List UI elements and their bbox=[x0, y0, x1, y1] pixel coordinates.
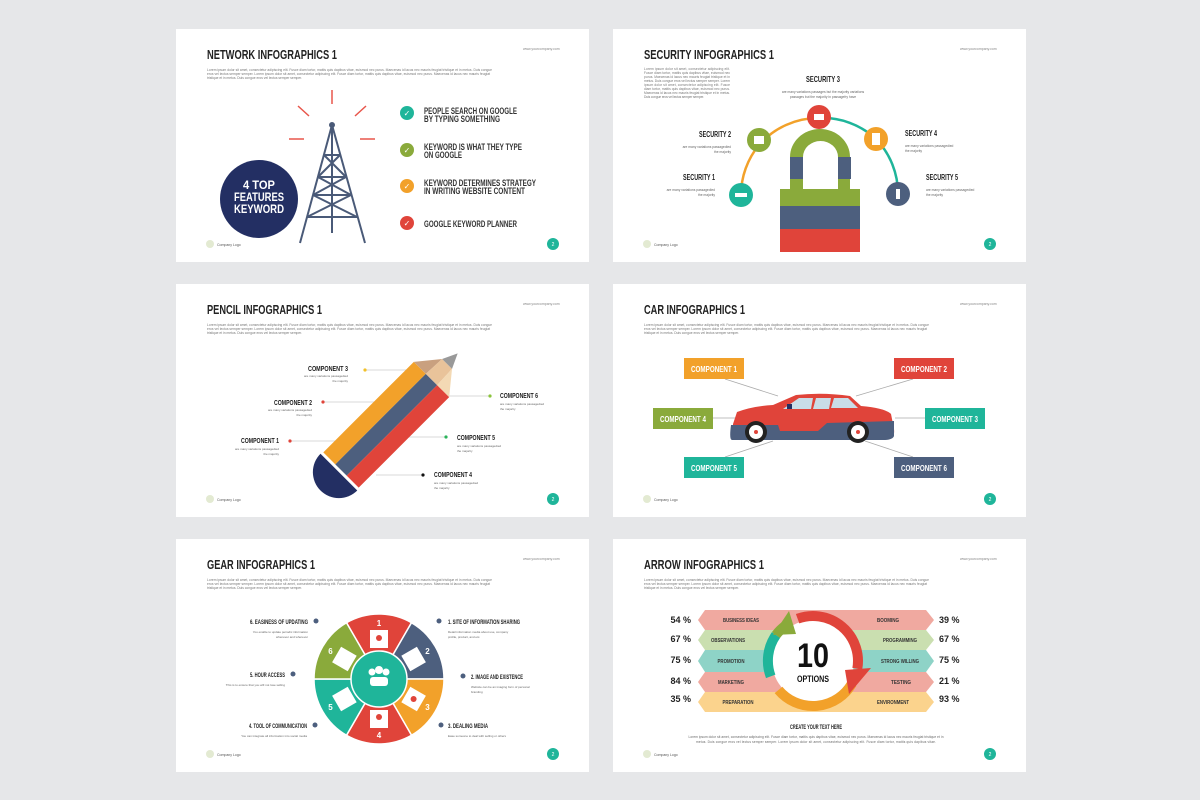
lorem text block: ipsum dolor sit amet, consectetur adipiscing elit. Fusce bbox=[644, 83, 730, 87]
gear labels: 4. TOOL OF COMMUNICATION bbox=[249, 723, 307, 730]
lorem text block: purus. Maecenas id lacus nec mauris feugiat tristique et in bbox=[644, 75, 730, 79]
lorem text block: Lorem ipsum dolor sit amet, consectetur adipiscing elit. bbox=[644, 67, 730, 71]
percentages bbox=[670, 615, 960, 704]
component labels: the majority bbox=[263, 452, 279, 456]
gear chart: 3 bbox=[425, 703, 430, 712]
footer: 2 bbox=[552, 752, 555, 758]
gear labels: You can integrate all information into social media bbox=[241, 734, 307, 738]
footer: 2 bbox=[989, 752, 992, 758]
footer bbox=[643, 238, 996, 250]
checklist: ✓ bbox=[404, 219, 410, 228]
footer: Company Logo bbox=[654, 498, 678, 502]
lorem text block: Maecenas id lacus nec mauris feugiat tristique et in metus. bbox=[644, 91, 730, 95]
component boxes: COMPONENT 4 bbox=[660, 414, 706, 424]
gear labels: 5. HOUR ACCESS bbox=[250, 672, 285, 679]
labels: SECURITY 3 bbox=[806, 74, 840, 84]
panel: car infographics bbox=[613, 284, 1026, 517]
footer bbox=[643, 748, 996, 760]
band labels: STRONG WILLING bbox=[881, 659, 919, 665]
band labels: PROMOTION bbox=[718, 659, 745, 665]
connector lines bbox=[713, 379, 925, 457]
heading: CAR INFOGRAPHICS 1 bbox=[644, 302, 745, 317]
labels bbox=[667, 74, 975, 197]
footer bbox=[206, 748, 559, 760]
labels: SECURITY 1 bbox=[683, 173, 715, 182]
lorem text block: eros vel lectus semper semper. Lorem ipsum dolor sit amet, consectetur adipiscing elit. Fusce diam tortor, mattis quis dapibus vitae, euismod nec purus. Maecenas id lacus nec mauris feugiat bbox=[207, 72, 490, 76]
band labels: MARKETING bbox=[718, 680, 744, 686]
labels: the majority bbox=[926, 193, 943, 197]
footer: 2 bbox=[552, 242, 555, 248]
checklist: BY TYPING SOMETHING bbox=[424, 114, 500, 124]
gear labels: 6. EASINESS OF UPDATING bbox=[250, 619, 308, 626]
component labels: COMPONENT 6 bbox=[500, 391, 538, 400]
band labels: TESTING bbox=[891, 680, 911, 686]
checklist bbox=[400, 106, 536, 230]
percentages: 35 % bbox=[670, 694, 691, 704]
percentages: 75 % bbox=[939, 655, 960, 665]
footer bbox=[643, 493, 996, 505]
component labels: the majority bbox=[434, 486, 450, 490]
gear chart: 2 bbox=[425, 647, 430, 656]
labels: are many variations passagedied bbox=[667, 188, 715, 192]
component labels: the majority bbox=[296, 413, 312, 417]
checklist: IN WRITING WEBSITE CONTENT bbox=[424, 186, 525, 196]
percentages: 54 % bbox=[670, 615, 691, 625]
gear labels: You enable to update periodic information bbox=[253, 630, 308, 634]
labels: are many variations passagedied bbox=[926, 188, 975, 192]
heading: NETWORK INFOGRAPHICS 1 bbox=[207, 47, 337, 62]
circle badge bbox=[220, 160, 298, 238]
labels: the majority bbox=[714, 150, 731, 154]
lorem text block: tristique et in metus. Duis congue eros vel lectus semper semper. bbox=[644, 586, 739, 590]
component labels: COMPONENT 2 bbox=[274, 398, 312, 407]
panel: gear infographics bbox=[176, 539, 589, 772]
website text: www.yourcompany.com bbox=[523, 302, 560, 306]
gear labels: profile, product, and etc. bbox=[448, 635, 480, 639]
lorem text block: tristique et in metus. Duis congue eros vel lectus semper semper. bbox=[644, 331, 739, 335]
icon: tower bbox=[300, 123, 365, 243]
lorem text block: metus. Duis congue eros vel lectus semper semper. Lorem bbox=[644, 79, 730, 83]
footer: Company Logo bbox=[654, 753, 678, 757]
band labels: BOOMING bbox=[877, 618, 899, 624]
lorem text block: Duis congue eros vel lectus semper semper. bbox=[644, 95, 704, 99]
footer: 2 bbox=[989, 242, 992, 248]
caption: Lorem ipsum dolor sit amet, consectetur adipiscing elit. Fusce diam tortor, mattis quis dapibus vitae, euismod nec purus. Maecenas id lacus nec mauris feugiat tristique et in bbox=[688, 735, 944, 739]
labels: the majority bbox=[905, 149, 922, 153]
component labels: COMPONENT 1 bbox=[241, 436, 279, 445]
component boxes: COMPONENT 3 bbox=[932, 414, 978, 424]
gear chart: 5 bbox=[328, 703, 333, 712]
component boxes: COMPONENT 6 bbox=[901, 463, 947, 473]
checklist: KEYWORD DETERMINES STRATEGY bbox=[424, 178, 536, 188]
arc bbox=[741, 118, 898, 195]
footer: Company Logo bbox=[217, 498, 241, 502]
gear labels: 2. IMAGE AND EXISTENCE bbox=[471, 674, 523, 681]
lorem text block: Lorem ipsum dolor sit amet, consectetur adipiscing elit. Fusce diam tortor, mattis quis dapibus vitae, euismod nec purus. Maecenas id lacus nec mauris feugiat tristique et in metus. Duis congue bbox=[207, 578, 492, 582]
gear labels: Detail information media about use, company bbox=[448, 630, 509, 634]
labels: are many variations passagedied bbox=[905, 144, 954, 148]
icon: lock bbox=[780, 129, 860, 252]
website text: www.yourcompany.com bbox=[960, 47, 997, 51]
gear labels: whenever and wherever bbox=[276, 635, 308, 639]
component labels: are many variations passagedied bbox=[434, 481, 478, 485]
component labels: the majority bbox=[457, 449, 473, 453]
percentages: 39 % bbox=[939, 615, 960, 625]
website text: www.yourcompany.com bbox=[523, 47, 560, 51]
website text: www.yourcompany.com bbox=[960, 302, 997, 306]
component labels: are many variations passagedied bbox=[500, 402, 544, 406]
panel: network infographics bbox=[176, 29, 589, 262]
pencil bbox=[302, 335, 476, 509]
lorem text block: Lorem ipsum dolor sit amet, consectetur adipiscing elit. Fusce diam tortor, mattis quis dapibus vitae, euismod nec purus. Maecenas id lacus nec mauris feugiat tristique et in metus. Duis congue bbox=[207, 323, 492, 327]
band labels: PREPARATION bbox=[722, 700, 754, 706]
lorem text block bbox=[207, 323, 492, 335]
arrow bands bbox=[698, 610, 934, 712]
circular arrow: 10 bbox=[797, 637, 829, 675]
footer: Company Logo bbox=[654, 243, 678, 247]
component boxes: COMPONENT 2 bbox=[901, 364, 947, 374]
circle badge: 4 TOP bbox=[243, 178, 275, 192]
lorem text block: Lorem ipsum dolor sit amet, consectetur adipiscing elit. Fusce diam tortor, mattis quis dapibus vitae, euismod nec purus. Maecenas id lacus nec mauris feugiat tristique et in metus. Duis congue bbox=[644, 578, 929, 582]
circle badge: FEATURES bbox=[234, 190, 284, 204]
lorem text block: eros vel lectus semper semper. Lorem ipsum dolor sit amet, consectetur adipiscing elit. Fusce diam tortor, mattis quis dapibus vitae, euismod nec purus. Maecenas id lacus nec mauris feugiat bbox=[207, 582, 490, 586]
panel: pencil infographics bbox=[176, 284, 589, 517]
footer: Company Logo bbox=[217, 243, 241, 247]
gear chart: 1 bbox=[377, 619, 382, 628]
checklist: ✓ bbox=[404, 146, 410, 155]
website text: www.yourcompany.com bbox=[960, 557, 997, 561]
lorem text block: Fusce diam tortor, mattis quis dapibus vitae, euismod nec bbox=[644, 71, 730, 75]
footer bbox=[206, 493, 559, 505]
lorem text block: tristique et in metus. Duis congue eros vel lectus semper semper. bbox=[207, 76, 302, 80]
component boxes: COMPONENT 5 bbox=[691, 463, 737, 473]
lorem text block bbox=[644, 578, 929, 590]
labels: are many variations passages but the majority variations bbox=[782, 90, 864, 94]
website text: www.yourcompany.com bbox=[523, 557, 560, 561]
band labels bbox=[711, 618, 919, 706]
lorem text block: eros vel lectus semper semper. Lorem ipsum dolor sit amet, consectetur adipiscing elit. Fusce diam tortor, mattis quis dapibus vitae, euismod nec purus. Maecenas id lacus nec mauris feugiat bbox=[644, 327, 927, 331]
component labels: are many variations passagedied bbox=[235, 447, 279, 451]
checklist: PEOPLE SEARCH ON GOOGLE bbox=[424, 106, 517, 116]
checklist: ON GOOGLE bbox=[424, 150, 462, 160]
heading: SECURITY INFOGRAPHICS 1 bbox=[644, 47, 774, 62]
labels: are many variations passagedied bbox=[683, 145, 731, 149]
gear labels: 3. DEALING MEDIA bbox=[448, 723, 488, 730]
lorem text block: Lorem ipsum dolor sit amet, consectetur adipiscing elit. Fusce diam tortor, mattis quis dapibus vitae, euismod nec purus. Maecenas id lacus nec mauris feugiat tristique et in metus. Duis congue bbox=[644, 323, 929, 327]
lorem text block: eros vel lectus semper semper. Lorem ipsum dolor sit amet, consectetur adipiscing elit. Fusce diam tortor, mattis quis dapibus vitae, euismod nec purus. Maecenas id lacus nec mauris feugiat bbox=[644, 582, 927, 586]
leader lines bbox=[290, 370, 490, 475]
band labels: OBSERVATIONS bbox=[711, 638, 745, 644]
icon: signal rays bbox=[289, 90, 375, 139]
labels: SECURITY 4 bbox=[905, 129, 937, 138]
gear labels: Website can be an imaging form of personal bbox=[471, 685, 530, 689]
component labels: are many variations passagedied bbox=[268, 408, 312, 412]
percentages: 84 % bbox=[670, 676, 691, 686]
component labels: COMPONENT 5 bbox=[457, 433, 495, 442]
security icons bbox=[729, 105, 910, 207]
component boxes bbox=[653, 358, 985, 478]
footer: Company Logo bbox=[217, 753, 241, 757]
circular arrow: OPTIONS bbox=[797, 674, 829, 684]
lorem text block: tristique et in metus. Duis congue eros vel lectus semper semper. bbox=[207, 331, 302, 335]
lorem text block: eros vel lectus semper semper. Lorem ipsum dolor sit amet, consectetur adipiscing elit. Fusce diam tortor, mattis quis dapibus vitae, euismod nec purus. Maecenas id lacus nec mauris feugiat bbox=[207, 327, 490, 331]
band labels: PROGRAMMING bbox=[883, 638, 917, 644]
labels: SECURITY 5 bbox=[926, 173, 958, 182]
icon: car bbox=[730, 394, 894, 443]
component boxes: COMPONENT 1 bbox=[691, 364, 737, 374]
caption: CREATE YOUR TEXT HERE bbox=[790, 725, 842, 731]
gear labels: branding bbox=[471, 690, 483, 694]
percentages: 93 % bbox=[939, 694, 960, 704]
checklist: KEYWORD IS WHAT THEY TYPE bbox=[424, 142, 522, 152]
heading: ARROW INFOGRAPHICS 1 bbox=[644, 557, 764, 572]
lorem text block bbox=[207, 578, 492, 590]
lorem text block bbox=[644, 323, 929, 335]
component labels: the majority bbox=[500, 407, 516, 411]
percentages: 75 % bbox=[670, 655, 691, 665]
percentages: 67 % bbox=[939, 634, 960, 644]
band labels: ENVIRONMENT bbox=[877, 700, 910, 706]
labels: passages but the majority in passagefry have bbox=[790, 95, 856, 99]
checklist: GOOGLE KEYWORD PLANNER bbox=[424, 219, 517, 229]
footer: 2 bbox=[989, 497, 992, 503]
gear chart: 4 bbox=[377, 731, 382, 740]
heading: PENCIL INFOGRAPHICS 1 bbox=[207, 302, 322, 317]
component labels: COMPONENT 3 bbox=[308, 364, 348, 373]
heading: GEAR INFOGRAPHICS 1 bbox=[207, 557, 315, 572]
component labels: the majority bbox=[332, 379, 348, 383]
component labels: COMPONENT 4 bbox=[434, 470, 473, 479]
gear labels: 1. SITE OF INFORMATION SHARING bbox=[448, 619, 520, 626]
percentages: 21 % bbox=[939, 676, 960, 686]
labels: SECURITY 2 bbox=[699, 130, 731, 139]
panel: arrow infographics bbox=[613, 539, 1026, 772]
gear labels: This is to ensure that you will not lose selling bbox=[226, 683, 285, 687]
footer bbox=[206, 238, 559, 250]
panel: security infographics bbox=[613, 29, 1026, 262]
lorem text block: tristique et in metus. Duis congue eros vel lectus semper semper. bbox=[207, 586, 302, 590]
lorem text block: Lorem ipsum dolor sit amet, consectetur adipiscing elit. Fusce diam tortor, mattis quis dapibus vitae, euismod nec purus. Maecenas id lacus nec mauris feugiat tristique et in metus. Duis congue bbox=[207, 68, 492, 72]
gear labels bbox=[226, 618, 530, 738]
caption: metus. Duis congue eros vel lectus semper semper. Lorem ipsum dolor sit amet, consectetur adipiscing elit. Fusce diam tortor, mattis quis dapibus vitae. bbox=[696, 740, 936, 744]
component labels: are many variations passagedied bbox=[457, 444, 501, 448]
lorem text block bbox=[207, 68, 492, 80]
labels: the majority bbox=[698, 193, 715, 197]
checklist: ✓ bbox=[404, 182, 410, 191]
percentages: 67 % bbox=[670, 634, 691, 644]
component labels: are many variations passagedied bbox=[304, 374, 348, 378]
band labels: BUSINESS IDEAS bbox=[723, 618, 759, 624]
circular arrow bbox=[768, 611, 871, 706]
caption bbox=[688, 725, 944, 744]
gear labels: Ease someone to deal with selling or others bbox=[448, 734, 507, 738]
circle badge: KEYWORD bbox=[234, 202, 284, 216]
footer: 2 bbox=[552, 497, 555, 503]
lorem text block: diam tortor, mattis quis dapibus vitae, euismod nec purus. bbox=[644, 87, 730, 91]
gear chart: 6 bbox=[328, 647, 333, 656]
gear chart bbox=[314, 614, 444, 744]
checklist: ✓ bbox=[404, 109, 410, 118]
component labels bbox=[235, 364, 544, 490]
lorem text block bbox=[644, 67, 730, 99]
